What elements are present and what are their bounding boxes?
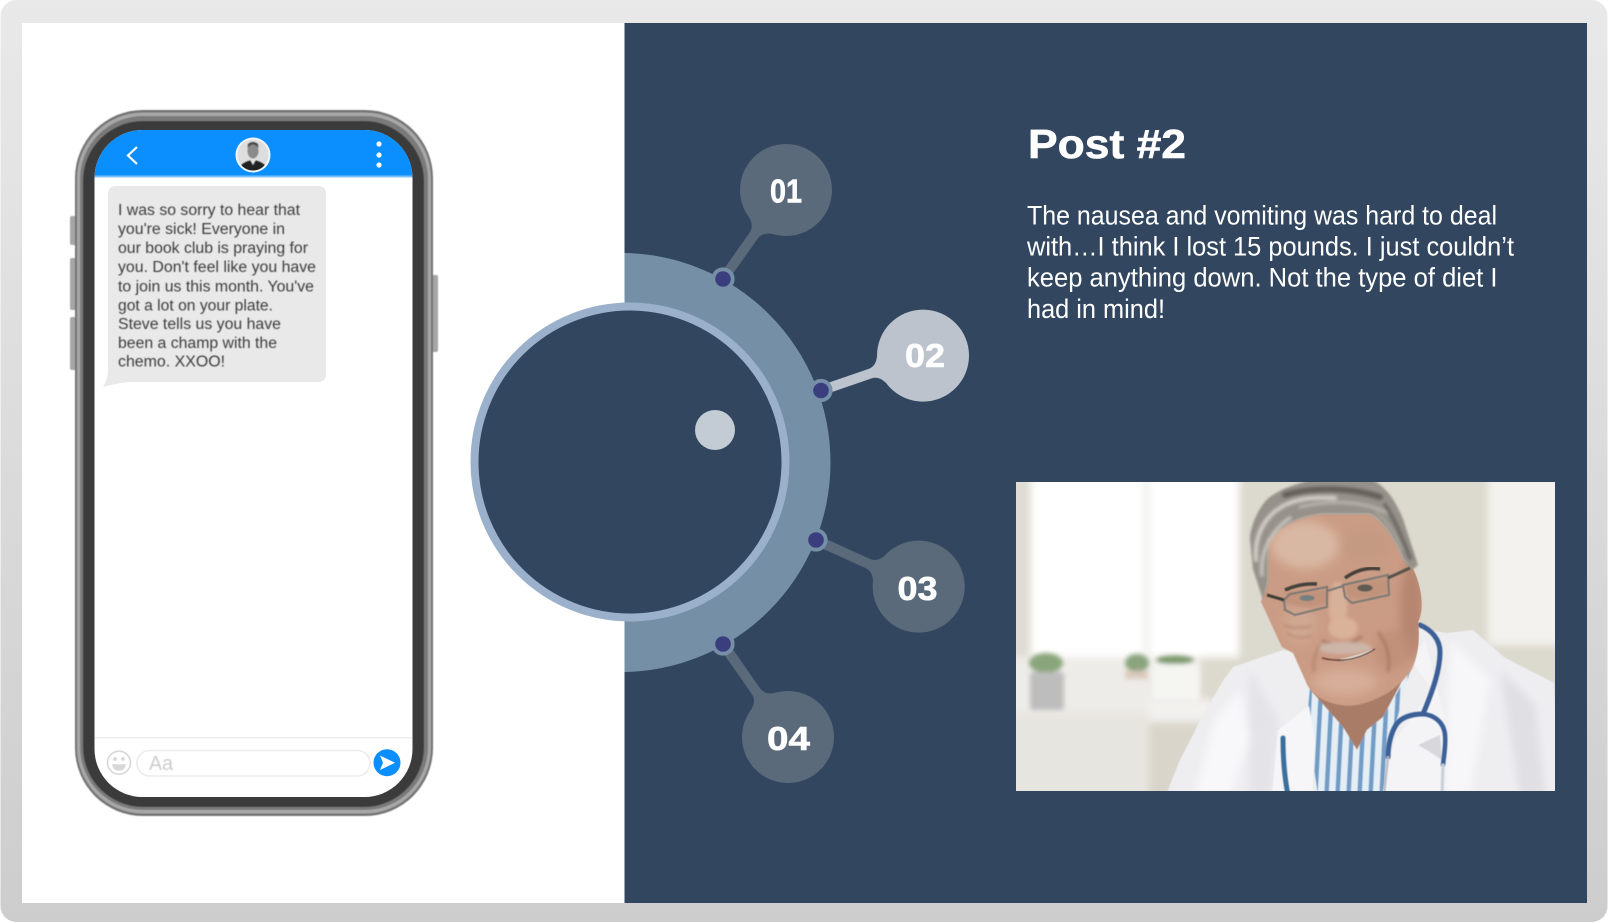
connector 03 bbox=[814, 535, 885, 581]
node dot 04 bbox=[713, 634, 733, 654]
eyebrows bbox=[1285, 568, 1380, 590]
bubble 03: 03 bbox=[898, 571, 938, 608]
messenger header bar bbox=[94, 130, 413, 178]
message text: chemo. XXOO! bbox=[118, 354, 225, 370]
eyes bbox=[1300, 584, 1372, 601]
phone body bbox=[75, 110, 433, 816]
mouth bbox=[1322, 649, 1375, 661]
photo: smiling doctor bbox=[1016, 482, 1555, 791]
connector 04 bbox=[719, 641, 775, 709]
inner circle bbox=[474, 306, 786, 618]
message text bbox=[118, 202, 316, 370]
body text: keep anything down. Not the type of diet I bbox=[1027, 262, 1498, 292]
bubble 04 bbox=[742, 691, 834, 783]
message text: you're sick! Everyone in bbox=[118, 221, 285, 238]
input divider bbox=[95, 737, 412, 738]
face shading bbox=[1271, 521, 1424, 696]
lab coat bbox=[1166, 628, 1560, 795]
photo background bbox=[1016, 482, 1555, 791]
bubble 04: 04 bbox=[767, 721, 810, 758]
face base bbox=[1261, 514, 1422, 706]
message text: our book club is praying for bbox=[118, 240, 308, 257]
menu dots bbox=[376, 141, 382, 168]
stethoscope bbox=[1283, 625, 1445, 795]
message text: got a lot on your plate. bbox=[118, 298, 273, 314]
neck and shirt bbox=[1272, 671, 1442, 791]
phone side buttons bbox=[70, 216, 438, 370]
body text: with…I think I lost 15 pounds. I just couldn’t bbox=[1026, 232, 1515, 262]
back chevron bbox=[128, 147, 137, 164]
node dot 02 bbox=[811, 381, 831, 400]
glasses bbox=[1267, 568, 1410, 615]
blurred plants bbox=[1029, 653, 1199, 710]
connector 02 bbox=[819, 356, 886, 395]
body text bbox=[1026, 200, 1515, 324]
outer arc bbox=[624, 253, 830, 672]
message text: to join us this month. You've bbox=[118, 278, 314, 296]
contact avatar bbox=[236, 138, 270, 172]
white left panel bbox=[22, 23, 625, 903]
smartphone bbox=[70, 110, 438, 816]
small indicator dot bbox=[695, 410, 735, 450]
body text: The nausea and vomiting was hard to deal bbox=[1027, 200, 1497, 230]
node dot 03 bbox=[806, 530, 826, 550]
body text: had in mind! bbox=[1027, 294, 1165, 324]
connector 01 bbox=[719, 218, 772, 282]
bubble 02 bbox=[877, 310, 969, 402]
phone screen bbox=[94, 130, 412, 797]
hair bbox=[1250, 480, 1418, 600]
heading: Post #2 bbox=[1028, 121, 1186, 167]
coat folds bbox=[1201, 656, 1544, 791]
bubble 01 bbox=[740, 144, 832, 236]
bubble 03 bbox=[873, 541, 965, 633]
message text: you. Don't feel like you have bbox=[118, 259, 316, 276]
input placeholder: Aa bbox=[149, 753, 174, 775]
hub diagram bbox=[470, 144, 969, 783]
message text: I was so sorry to hear that bbox=[118, 202, 301, 219]
message bubble bbox=[103, 186, 326, 387]
bubble 01: 01 bbox=[770, 174, 802, 210]
hair streaks bbox=[1256, 489, 1410, 575]
bubble 02: 02 bbox=[905, 338, 945, 375]
send button bbox=[374, 749, 400, 776]
node dot 01 bbox=[713, 269, 733, 289]
dark blue right panel bbox=[624, 23, 1587, 903]
message input field bbox=[137, 750, 370, 776]
message text: Steve tells us you have bbox=[118, 316, 281, 333]
emoji icon bbox=[108, 751, 130, 774]
doctor head bbox=[1250, 480, 1424, 706]
message text: been a champ with the bbox=[118, 335, 277, 352]
